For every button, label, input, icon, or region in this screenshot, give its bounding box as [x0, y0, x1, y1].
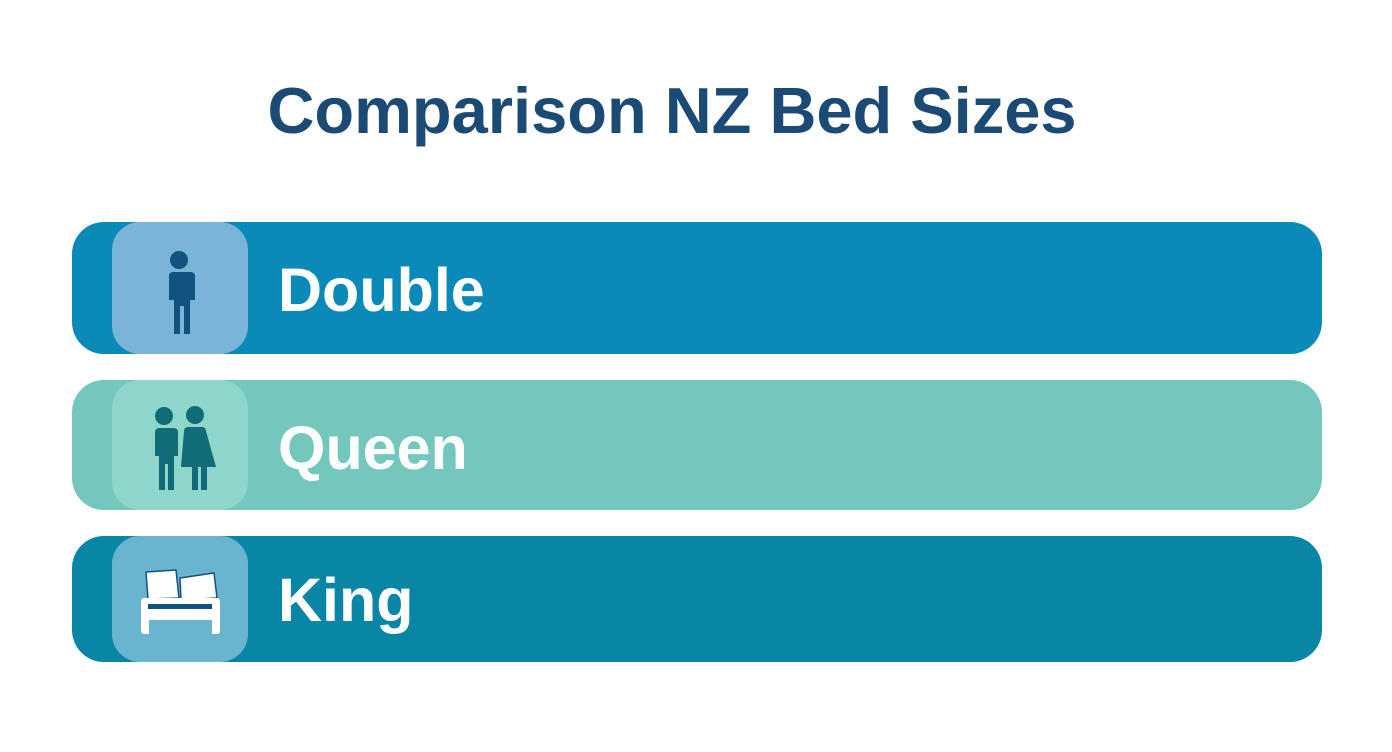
panel: queen: [72, 380, 1322, 510]
icon: bed: [112, 536, 248, 662]
panel: king: [72, 536, 1322, 662]
label: king: King: [278, 566, 414, 634]
title: Comparison NZ Bed Sizes: [267, 74, 1077, 147]
panel: double: [72, 222, 1322, 354]
icon: couple: [112, 380, 248, 510]
label: queen: Queen: [278, 414, 468, 482]
icon: single person: [112, 222, 248, 354]
label: double: Double: [278, 256, 485, 324]
